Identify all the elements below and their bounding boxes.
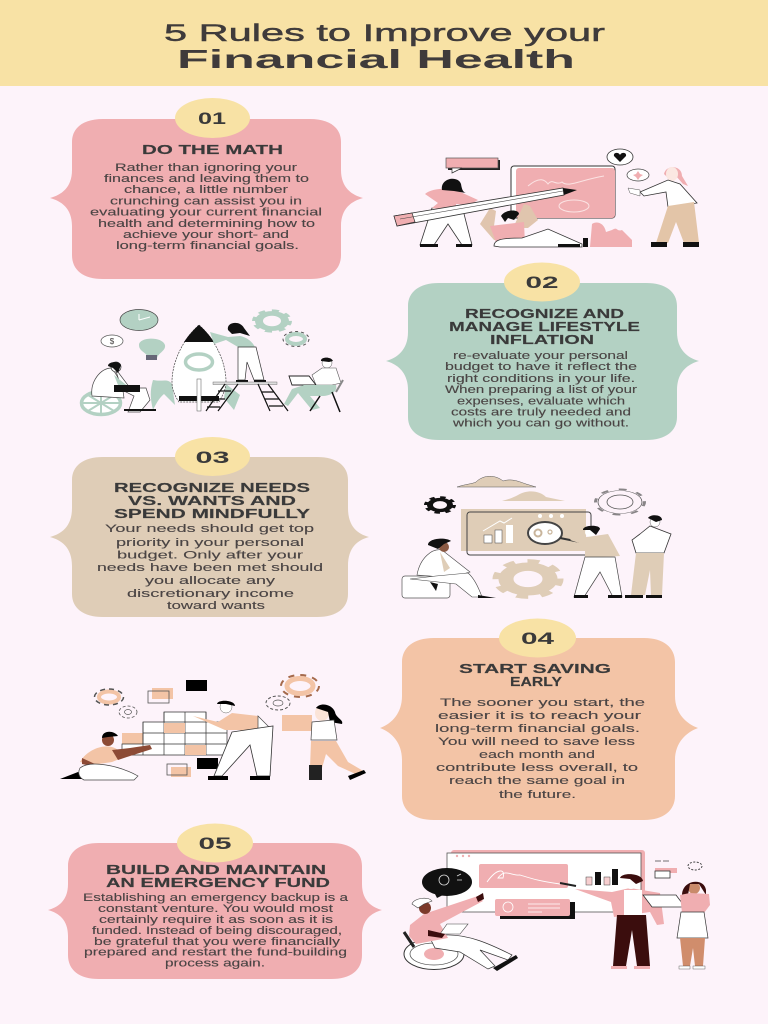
panel: rule 05 build an emergency fund: prepared and restart the fund-building <box>84 946 347 958</box>
panel: rule 01 do the math: long-term financial goals. <box>116 240 299 252</box>
panel: rule 02 recognize and manage lifestyle inflation <box>386 262 699 440</box>
panel: rule 04 start saving early: 04 <box>521 629 555 648</box>
title banner <box>0 0 768 86</box>
panel: rule 05 build an emergency fund: AN EMERGENCY FUND <box>106 876 330 890</box>
panel: rule 02 recognize and manage lifestyle inflation: INFLATION <box>490 333 594 347</box>
panel: rule 01 do the math: evaluating your current financial <box>90 206 322 218</box>
panel: rule 03 recognize needs vs wants: discretionary income <box>127 588 294 600</box>
panel: rule 04 start saving early: START SAVING <box>459 662 611 676</box>
panel: rule 02 recognize and manage lifestyle inflation: RECOGNIZE AND <box>465 307 624 321</box>
panel: rule 05 build an emergency fund: 05 <box>198 834 232 853</box>
title banner: 5 Rules to Improve your <box>164 20 605 47</box>
panel: rule 01 do the math: DO THE MATH <box>142 143 283 157</box>
panel: rule 04 start saving early: The sooner you start, the <box>440 697 645 709</box>
panel: rule 03 recognize needs vs wants: VS. WANTS AND <box>128 494 296 508</box>
panel: rule 02 recognize and manage lifestyle inflation: re-evaluate your personal <box>453 350 628 362</box>
panel: rule 03 recognize needs vs wants: RECOGNIZE NEEDS <box>114 481 310 495</box>
panel: rule 04 start saving early: reach the same goal in <box>449 775 625 787</box>
panel: rule 04 start saving early: You will need to save less <box>438 736 636 748</box>
panel: rule 05 build an emergency fund: certainly require it as soon as it is <box>99 914 333 926</box>
panel: rule 01 do the math: achieve your short- and <box>123 229 289 241</box>
panel: rule 04 start saving early: contribute less overall, to <box>436 762 638 774</box>
panel: rule 03 recognize needs vs wants: you allocate any <box>145 575 276 587</box>
illustration: building blocks team <box>60 675 366 780</box>
panel: rule 02 recognize and manage lifestyle inflation: When preparing a list of your <box>445 384 638 396</box>
panel: rule 02 recognize and manage lifestyle inflation: MANAGE LIFESTYLE <box>449 320 640 334</box>
panel: rule 03 recognize needs vs wants: Your needs should get top <box>105 523 314 535</box>
panel: rule 05 build an emergency fund: funded. Instead of being discouraged, <box>92 925 342 937</box>
panel: rule 03 recognize needs vs wants: priority in your personal <box>116 537 304 549</box>
panel: rule 01 do the math: finances and leaving them to <box>104 173 309 185</box>
panel: rule 05 build an emergency fund: process again. <box>165 958 265 970</box>
panel: rule 02 recognize and manage lifestyle inflation: costs are truly needed and <box>451 406 631 418</box>
panel: rule 04 start saving early: long-term financial goals. <box>435 723 640 735</box>
panel: rule 01 do the math: crunching can assist you in <box>110 196 302 208</box>
illustration: pencil team at board <box>394 149 699 247</box>
panel: rule 01 do the math: chance, a little number <box>124 184 289 196</box>
panel: rule 01 do the math <box>50 98 363 279</box>
panel: rule 02 recognize and manage lifestyle inflation: 02 <box>526 273 558 292</box>
title banner: Financial Health <box>177 44 575 74</box>
panel: rule 02 recognize and manage lifestyle inflation: right conditions in your life. <box>447 373 635 385</box>
panel: rule 03 recognize needs vs wants: needs have been met should <box>97 562 323 574</box>
panel: rule 05 build an emergency fund <box>48 824 382 979</box>
panel: rule 04 start saving early: easier it is to reach your <box>438 710 642 722</box>
illustration: presentation team <box>404 850 710 971</box>
panel: rule 02 recognize and manage lifestyle inflation: expenses, evaluate which <box>457 396 625 408</box>
illustration: data analysis team <box>402 476 671 598</box>
panel: rule 05 build an emergency fund: BUILD AND MAINTAIN <box>106 863 326 877</box>
panel: rule 02 recognize and manage lifestyle inflation: budget to have it reflect the <box>445 361 637 373</box>
panel: rule 04 start saving early: the future. <box>499 789 576 801</box>
panel: rule 01 do the math: 01 <box>198 109 226 128</box>
panel: rule 03 recognize needs vs wants: SPEND MINDFULLY <box>114 507 311 521</box>
panel: rule 03 recognize needs vs wants <box>50 437 369 617</box>
illustration: rocket launch team <box>82 310 343 414</box>
panel: rule 01 do the math: health and determining how to <box>98 218 315 230</box>
panel: rule 03 recognize needs vs wants: toward wants <box>167 600 266 612</box>
panel: rule 04 start saving early: each month and <box>479 749 595 761</box>
panel: rule 03 recognize needs vs wants: budget. Only after your <box>117 550 304 562</box>
panel: rule 05 build an emergency fund: Establishing an emergency backup is a <box>83 892 348 904</box>
panel: rule 05 build an emergency fund: be grateful that you were financially <box>94 936 341 948</box>
panel: rule 02 recognize and manage lifestyle inflation: which you can go without. <box>452 418 629 430</box>
panel: rule 03 recognize needs vs wants: 03 <box>196 448 230 467</box>
illustration: rocket launch team: $ <box>110 337 115 346</box>
panel: rule 04 start saving early: EARLY <box>510 675 563 689</box>
panel: rule 01 do the math: Rather than ignoring your <box>115 162 298 174</box>
panel: rule 05 build an emergency fund: constant venture. You would most <box>98 903 333 915</box>
panel: rule 04 start saving early <box>380 618 698 820</box>
